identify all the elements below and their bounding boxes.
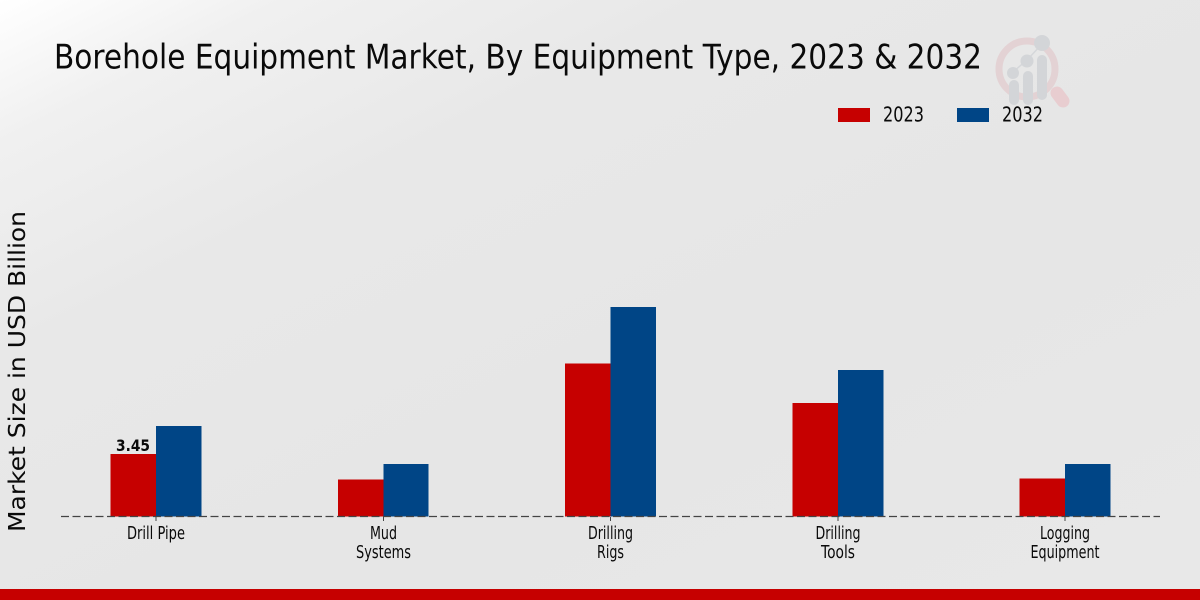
- legend: [838, 102, 1043, 126]
- value label: 3.45: [116, 436, 150, 455]
- category labels: Drilling: [816, 524, 860, 544]
- footer bar: [0, 589, 1200, 600]
- category labels: Logging: [1040, 524, 1090, 544]
- icon: watermark logo: [999, 35, 1063, 105]
- baseline: [61, 516, 1160, 518]
- category labels: Rigs: [597, 543, 624, 563]
- category labels: Equipment: [1030, 543, 1100, 563]
- y axis label: Market Size in USD Billion: [5, 211, 31, 532]
- category labels: Tools: [820, 543, 855, 563]
- title: Borehole Equipment Market, By Equipment Type, 2023 & 2032: [54, 38, 982, 78]
- bars: Drilling Tools: [792, 370, 884, 516]
- legend: 2032: 2032: [1002, 102, 1043, 126]
- category labels: Drill Pipe: [127, 524, 185, 544]
- bars: Logging Equipment: [1020, 464, 1110, 516]
- category labels: [127, 524, 1100, 563]
- bars: Drill Pipe: [110, 426, 202, 516]
- category labels: Mud: [370, 524, 397, 544]
- bars: Mud Systems: [338, 464, 428, 516]
- legend: 2032: [957, 102, 1043, 126]
- legend: 2023: [838, 102, 924, 126]
- bar chart: [61, 307, 1160, 563]
- category labels: Drilling: [588, 524, 633, 544]
- category labels: Systems: [356, 543, 411, 563]
- bars: Drilling Rigs: [565, 307, 656, 516]
- legend: 2023: 2023: [883, 102, 924, 126]
